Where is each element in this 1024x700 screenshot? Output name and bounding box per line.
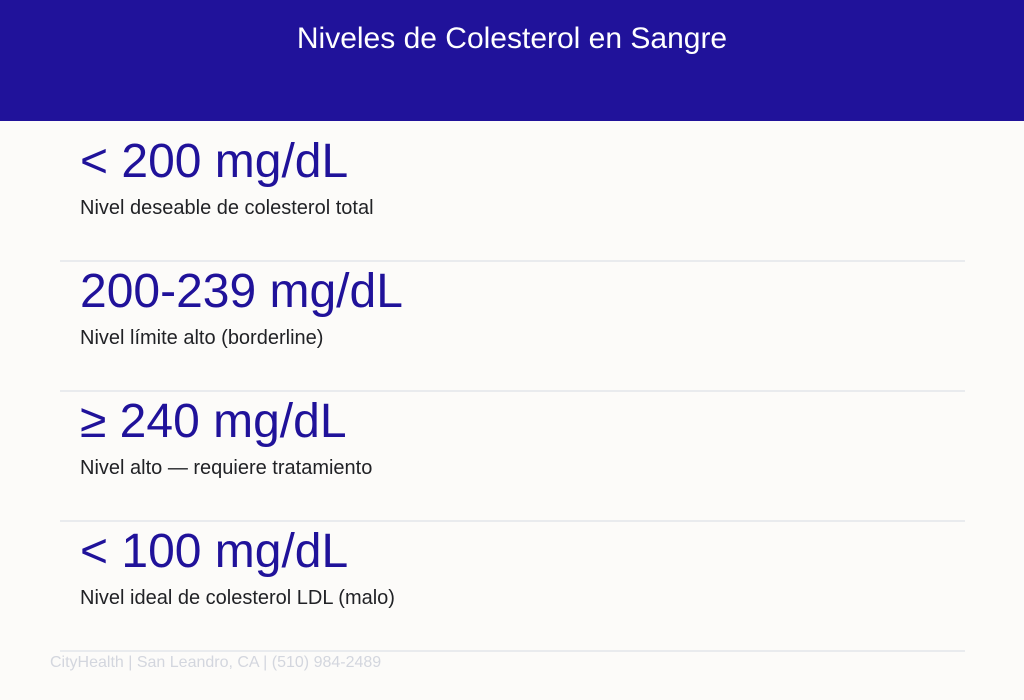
value: 200-239: 200-239 mg/dL [80, 265, 403, 318]
description: desirable: Nivel deseable de colesterol total [80, 197, 374, 219]
header band [0, 0, 1024, 121]
description: borderline: Nivel límite alto (borderline) [80, 327, 323, 349]
panel: borderline level [60, 262, 965, 392]
panel: ideal LDL level [60, 522, 965, 652]
value: under 100: < 100 mg/dL [80, 525, 348, 578]
footer contact text: CityHealth | San Leandro, CA | (510) 984-2489 [50, 654, 381, 671]
panel: high level [60, 392, 965, 522]
panel: total desirable level [60, 132, 965, 262]
title: Niveles de Colesterol en Sangre [297, 22, 727, 55]
value: under 200: < 200 mg/dL [80, 135, 348, 188]
description: ideal LDL: Nivel ideal de colesterol LDL (malo) [80, 587, 395, 609]
description: high: Nivel alto — requiere tratamiento [80, 457, 372, 479]
value: 240 or more: ≥ 240 mg/dL [80, 395, 347, 448]
